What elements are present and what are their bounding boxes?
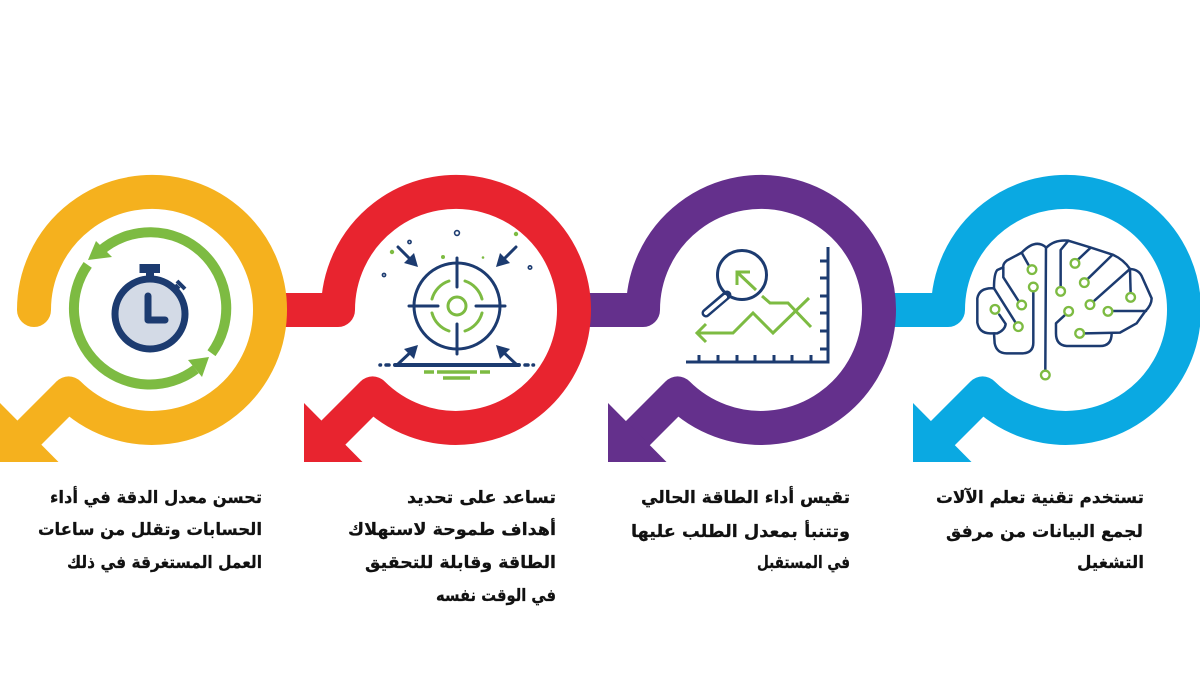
text block: step 1 machine learning: تستخدم تقنية تعلم الآلات bbox=[936, 487, 1144, 508]
text block: step 2 energy performance: في المستقبل bbox=[757, 553, 850, 573]
text block: step 1 machine learning bbox=[936, 487, 1144, 573]
text block: step 2 energy performance bbox=[631, 486, 850, 573]
panel: yellow step ribbon bbox=[0, 192, 270, 462]
text block: step 4 accuracy: الحسابات وتقلل من ساعات bbox=[38, 520, 262, 540]
text block: step 4 accuracy: تحسن معدل الدقة في أداء bbox=[50, 486, 262, 508]
icon: target with arrows bbox=[380, 231, 534, 378]
panel: purple step ribbon bbox=[575, 192, 879, 462]
text block: step 2 energy performance: وتتنبأ بمعدل الطلب عليها bbox=[631, 520, 850, 542]
icon: chart with magnifier bbox=[686, 247, 829, 364]
panel: blue step ribbon bbox=[880, 192, 1184, 462]
panel: red step ribbon bbox=[270, 192, 574, 462]
icon: brain circuit bbox=[977, 240, 1152, 379]
text block: step 2 energy performance: تقيس أداء الطاقة الحالي bbox=[641, 486, 850, 508]
text block: step 3 ambitious targets: أهداف طموحة لاستهلاك bbox=[348, 518, 556, 540]
text block: step 1 machine learning: التشغيل bbox=[1077, 553, 1144, 573]
text block: step 3 ambitious targets: الطاقة وقابلة للتحقيق bbox=[365, 553, 556, 573]
text block: step 1 machine learning: لجمع البيانات من مرفق bbox=[946, 522, 1143, 542]
text block: step 4 accuracy bbox=[38, 486, 262, 573]
text block: step 3 ambitious targets: تساعد على تحديد bbox=[407, 488, 556, 508]
text block: step 3 ambitious targets: في الوقت نفسه bbox=[436, 586, 556, 606]
text block: step 3 ambitious targets bbox=[348, 488, 556, 606]
text block: step 4 accuracy: العمل المستغرقة في ذلك bbox=[67, 553, 262, 573]
icon: stopwatch with cycle arrows bbox=[74, 232, 226, 385]
